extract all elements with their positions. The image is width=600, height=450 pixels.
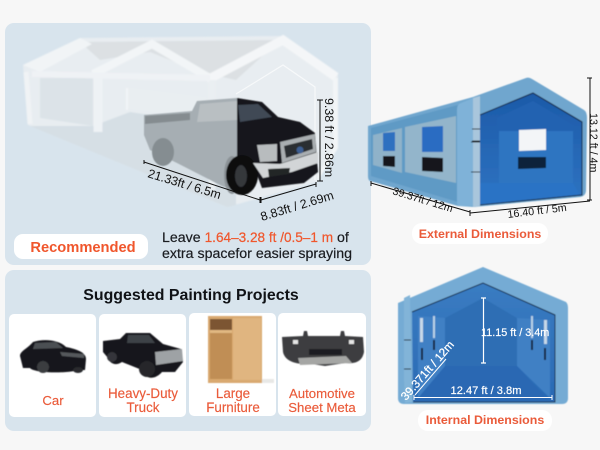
dimension: internal length 39.37 ft: 39.371ft / 12m [398, 338, 457, 403]
badge: internal dimensions [418, 410, 552, 431]
illustration: truck [144, 98, 318, 195]
dimension: external height 13.12 ft: 13.12 ft / 4m [587, 113, 599, 173]
dimension: external width 16.40 ft: 16.40 ft / 5m [507, 202, 567, 221]
icon: wardrobe [208, 316, 274, 383]
illustration: external tent [368, 78, 587, 207]
dimension: height 9.38 ft: 9.38 ft / 2.86m [322, 98, 336, 177]
badge: external dimensions: External Dimensions [419, 227, 541, 241]
dimension: external width 16.40 ft [470, 201, 590, 221]
card: heavy-duty truck [99, 314, 186, 417]
card: car [9, 314, 96, 417]
icon: truck [103, 333, 183, 378]
card: large furniture: Furniture [206, 400, 260, 415]
dimension: internal width 12.47 ft [414, 385, 552, 400]
dimension: external height 13.12 ft [587, 78, 599, 200]
panel: recommended size [5, 23, 371, 265]
card: large furniture [189, 313, 276, 416]
text: spacing advice: extra spacefor easier spraying [162, 246, 352, 262]
card: large furniture: Large [216, 386, 250, 401]
icon: car [20, 340, 86, 373]
dimension: length 21.33 ft: 21.33ft / 6.5m [146, 166, 223, 202]
dimension: internal height 11.15 ft: 11.15 ft / 3.4m [481, 327, 549, 339]
badge: recommended [14, 234, 148, 259]
dimension: external length 39.37 ft: 39.37ft / 12m [391, 185, 454, 215]
badge: recommended: Recommended [30, 240, 136, 256]
card: heavy-duty truck: Truck [127, 400, 160, 415]
text: spacing advice [162, 230, 352, 262]
panel: suggested painting projects [5, 270, 371, 431]
dimension: internal height 11.15 ft [481, 298, 549, 363]
card: car: Car [42, 393, 64, 408]
text: spacing advice: Leave 1.64–3.28 ft /0.5–1 m of [162, 230, 349, 246]
illustration: internal tent [398, 267, 568, 404]
card: heavy-duty truck: Heavy-Duty [108, 386, 178, 401]
dimension: internal width 12.47 ft: 12.47 ft / 3.8m [451, 385, 521, 397]
card: automotive sheet metal: Automotive [289, 386, 355, 401]
card: automotive sheet metal [278, 313, 366, 416]
dimension: length 21.33 ft [144, 160, 260, 203]
card: automotive sheet metal: Sheet Meta [288, 400, 356, 415]
icon: bumper [282, 331, 364, 366]
badge: external dimensions [412, 223, 548, 244]
dimension: external length 39.37 ft [371, 181, 470, 216]
heading: Suggested Painting Projects [83, 287, 299, 304]
badge: internal dimensions: Internal Dimensions [426, 413, 544, 427]
dimension: width 8.83 ft: 8.83ft / 2.69m [259, 188, 335, 224]
illustration: transparent tent [23, 36, 338, 207]
